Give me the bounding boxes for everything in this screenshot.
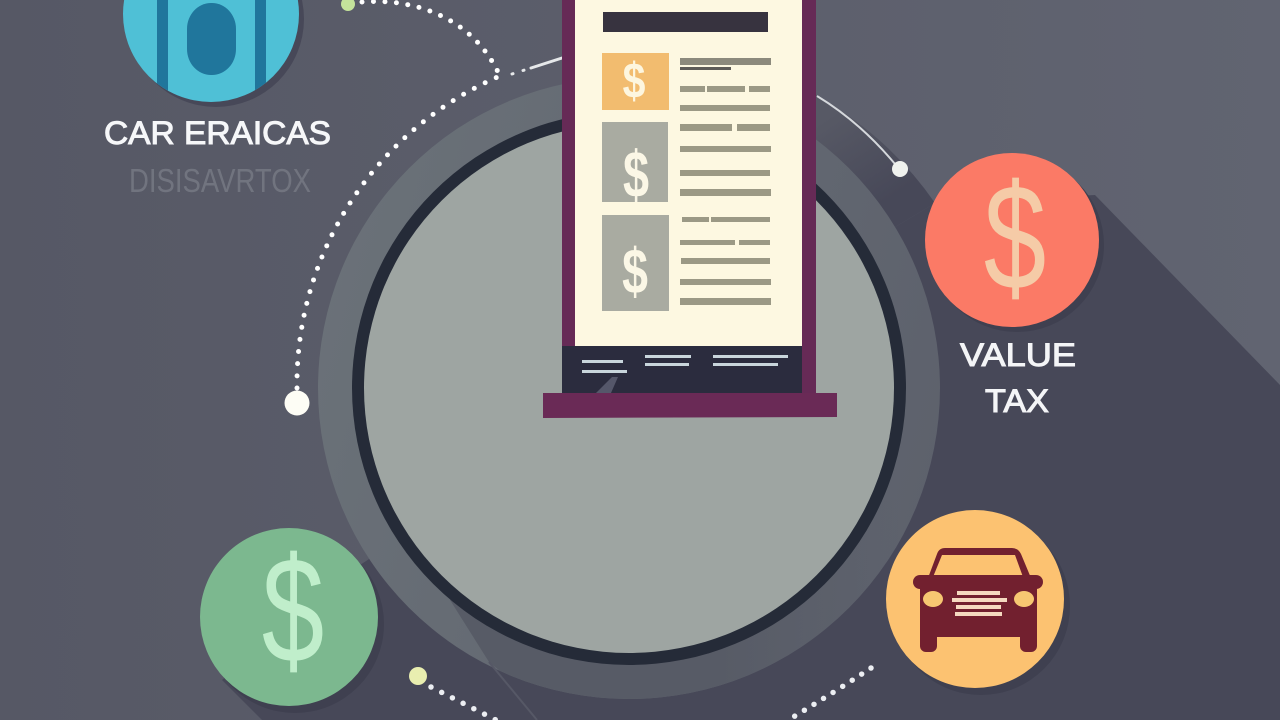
tile: gray dollar one	[602, 122, 668, 212]
outer ring	[318, 77, 940, 699]
connector: right thin line	[817, 96, 895, 164]
node: left white dot	[284, 390, 310, 416]
label: value tax	[960, 337, 1076, 419]
badge: blue car icon	[123, 0, 304, 107]
dotted connector: bottom left	[431, 687, 500, 720]
upper right shadow band	[629, 75, 935, 388]
car icon	[913, 548, 1043, 652]
node: right white dot	[892, 161, 908, 177]
green dollar sign: $	[262, 527, 324, 695]
tile: orange dollar	[602, 53, 669, 110]
badge: green dollar	[200, 527, 384, 713]
ring shadow wedge	[450, 600, 746, 699]
poster text lines	[680, 58, 771, 305]
central dial	[318, 77, 960, 720]
tile: gray dollar two	[602, 215, 669, 311]
label: faint subheading: DISISAVRTOX	[129, 162, 311, 199]
long diagonal shadow	[222, 195, 1280, 720]
poster: tax document	[543, 0, 837, 418]
blue badge disc	[123, 0, 299, 102]
label: value tax: TAX	[985, 383, 1049, 419]
badge: coral dollar	[925, 153, 1104, 332]
poster frame	[562, 0, 816, 394]
dotted connector: bottom right	[785, 668, 871, 720]
dark ring	[352, 111, 906, 665]
green badge shadow	[206, 535, 384, 713]
faint line under ring	[489, 662, 537, 720]
blue badge glyph	[157, 0, 266, 90]
poster base	[543, 393, 837, 418]
node: bottom left dot	[409, 667, 427, 685]
poster heading bar	[603, 12, 768, 32]
node: green top dot	[341, 0, 355, 11]
connector to poster	[512, 58, 562, 74]
poster paper	[575, 0, 802, 346]
label: value tax: VALUE	[960, 337, 1076, 373]
dotted connector: left arc	[297, 76, 500, 388]
badge: orange car	[886, 510, 1070, 695]
tile: gray dollar two: $	[622, 236, 648, 307]
car badge shadow	[892, 517, 1070, 695]
coral badge shadow	[930, 158, 1104, 332]
blue badge shadow	[128, 0, 304, 107]
tile: gray dollar one: $	[623, 138, 649, 212]
dial face	[364, 123, 894, 653]
tile: orange dollar: $	[623, 53, 645, 109]
coral dollar sign: $	[984, 154, 1046, 322]
car badge disc	[886, 510, 1064, 688]
label: car heading: CAR ERAICAS	[104, 115, 331, 151]
green badge disc	[200, 528, 378, 706]
coral badge disc	[925, 153, 1099, 327]
dotted connector: top curve	[362, 1, 498, 72]
poster footer	[562, 346, 802, 393]
